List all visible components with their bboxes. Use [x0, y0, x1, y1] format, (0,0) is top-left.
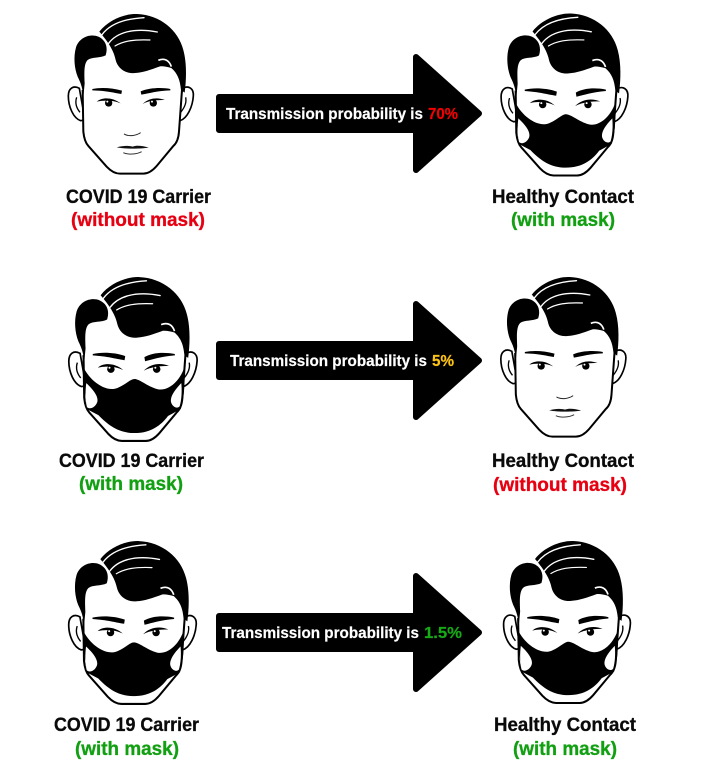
icon: face with mask: [504, 541, 630, 703]
label: without mask: (without mask): [493, 475, 627, 496]
label: with mask: (with mask): [75, 739, 179, 760]
panel: row 3 carrier with mask: [54, 541, 200, 760]
arrow: 5 percent transmission: [219, 304, 479, 417]
panel: row 2 contact without mask: [492, 277, 635, 496]
label: Healthy Contact: Healthy Contact: [492, 187, 635, 208]
arrow: 5 percent transmission: Transmission probability is: [230, 353, 427, 370]
icon: face with mask: [69, 541, 196, 704]
label: with mask: (with mask): [511, 210, 615, 231]
arrow: 1.5 percent transmission: Transmission probability is: [222, 625, 419, 642]
panel: row 3 contact with mask: [494, 541, 637, 760]
icon: face without mask: [68, 14, 193, 174]
label: Healthy Contact: Healthy Contact: [492, 451, 635, 472]
panel: row 2 carrier with mask: [59, 277, 205, 495]
label: with mask: (with mask): [79, 474, 183, 495]
label: COVID 19 Carrier: COVID 19 Carrier: [59, 451, 205, 472]
icon: face without mask: [501, 277, 626, 437]
icon: face with mask: [69, 277, 197, 441]
arrow: 70 percent transmission: 70%: [428, 106, 458, 123]
arrow: 1.5 percent transmission: 1.5%: [424, 625, 462, 642]
label: with mask: (with mask): [513, 739, 617, 760]
panel: row 1 contact with mask: [492, 14, 635, 231]
panel: row 1 carrier without mask: [66, 14, 212, 231]
arrow: 1.5 percent transmission: [219, 576, 479, 689]
arrow: 70 percent transmission: Transmission probability is: [226, 106, 423, 123]
label: COVID 19 Carrier: COVID 19 Carrier: [54, 715, 200, 736]
label: COVID 19 Carrier: COVID 19 Carrier: [66, 187, 212, 208]
arrow: 5 percent transmission: 5%: [432, 353, 454, 370]
label: Healthy Contact: Healthy Contact: [494, 715, 637, 736]
arrow: 70 percent transmission: [219, 57, 479, 170]
icon: face with mask: [501, 14, 628, 175]
label: without mask: (without mask): [71, 210, 205, 231]
